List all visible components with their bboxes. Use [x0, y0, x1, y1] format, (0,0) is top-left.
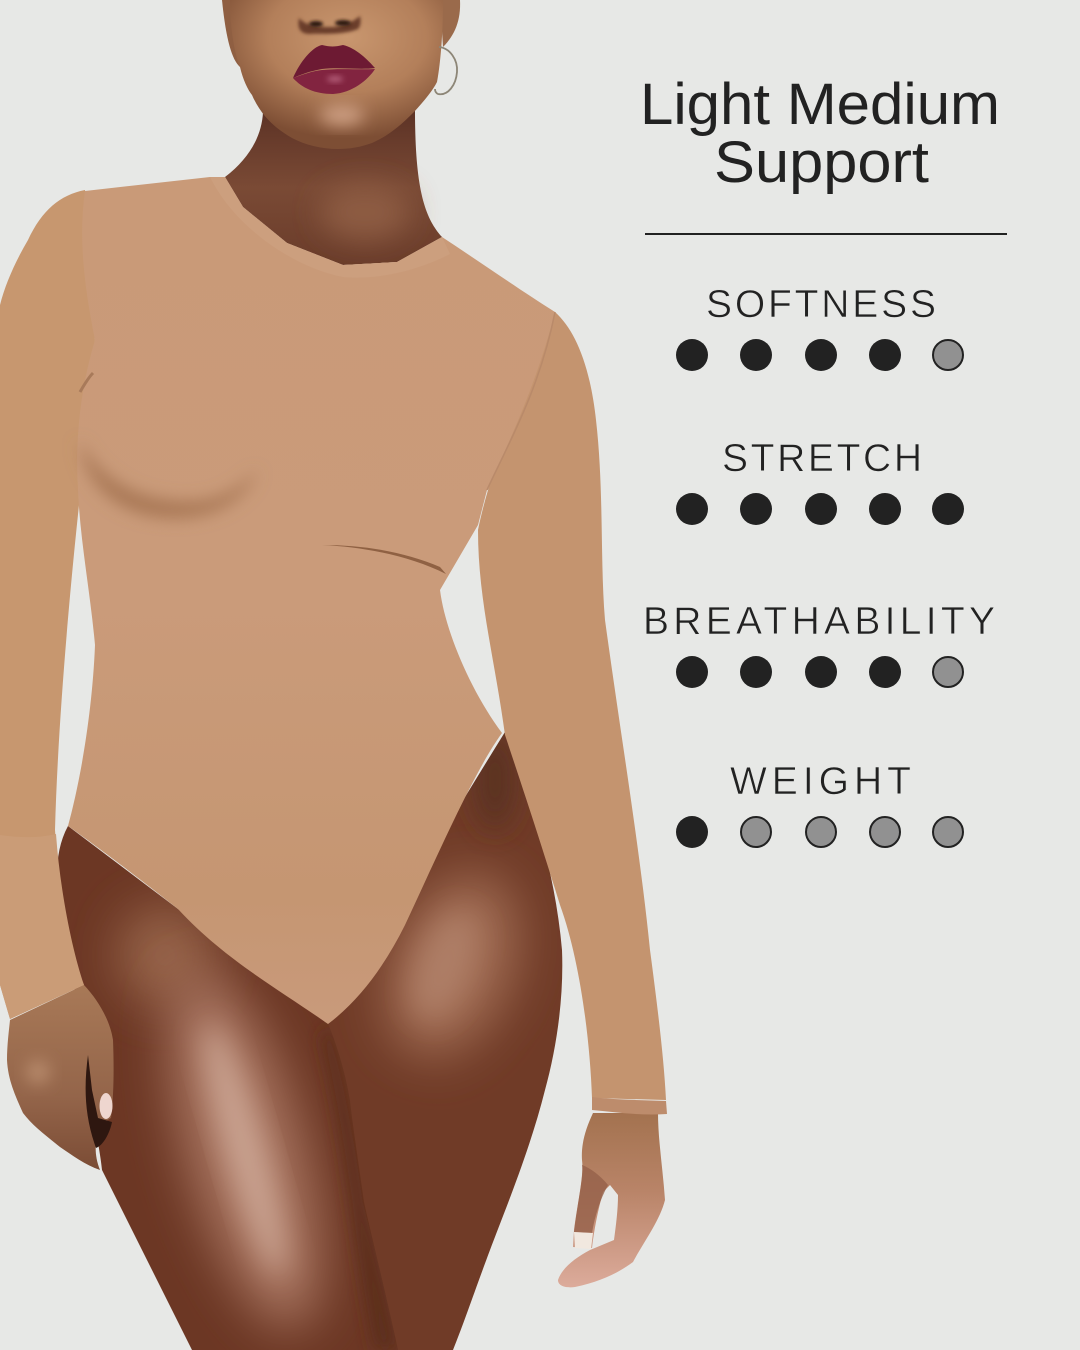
right leg: [326, 732, 562, 1350]
right hand: [558, 1113, 665, 1287]
rating: breathability: BREATHABILITY: [643, 600, 995, 643]
rating: stretch: [676, 437, 964, 525]
armpit crease: [80, 373, 93, 392]
title: Light Medium: [640, 72, 1000, 137]
rating: softness: SOFTNESS: [706, 283, 936, 326]
nose shadow: [298, 16, 361, 34]
right cuff: [592, 1097, 667, 1115]
lips: [293, 45, 375, 94]
left sleeve: [0, 190, 95, 1019]
knuckle highlight: [26, 1060, 50, 1084]
upper thigh glow: [117, 905, 213, 1005]
thigh shine: [190, 1020, 300, 1280]
left hand: [7, 985, 114, 1170]
rating: weight: [676, 760, 963, 848]
thigh glow: [138, 956, 352, 1344]
lip highlight: [327, 76, 343, 82]
bodysuit torso: [68, 177, 555, 1024]
chin highlight: [320, 105, 364, 125]
model figure: [0, 0, 667, 1350]
nostril right: [335, 20, 351, 26]
neck: [225, 110, 442, 265]
sleeve seam: [487, 312, 555, 490]
under-bust crease: [322, 545, 446, 574]
inner shade: [326, 1042, 394, 1348]
bust shading: [79, 440, 258, 518]
left ear: [222, 0, 240, 67]
right hip shadow: [475, 730, 515, 830]
right ear: [440, 0, 460, 47]
rating: softness: [676, 283, 963, 371]
thumb nail: [574, 1232, 593, 1249]
nostril left: [309, 21, 323, 27]
title: [640, 72, 1000, 195]
left cuff: [0, 834, 84, 1019]
rating: stretch: STRETCH: [722, 437, 922, 480]
divider: [645, 233, 1007, 235]
right thigh glow: [361, 854, 543, 1076]
rating: breathability: [643, 600, 995, 688]
right sleeve: [478, 312, 667, 1115]
title: Support: [714, 130, 929, 195]
rating: weight: WEIGHT: [730, 760, 911, 803]
face: [230, 0, 443, 149]
left leg: [58, 826, 398, 1350]
thumb gap: [86, 1055, 112, 1148]
earring: [435, 47, 457, 94]
neck highlight: [320, 184, 410, 240]
thumb shade: [574, 1165, 608, 1233]
right thigh shine: [406, 912, 480, 1018]
thumb nail: [100, 1093, 112, 1119]
collar band: [210, 177, 450, 278]
